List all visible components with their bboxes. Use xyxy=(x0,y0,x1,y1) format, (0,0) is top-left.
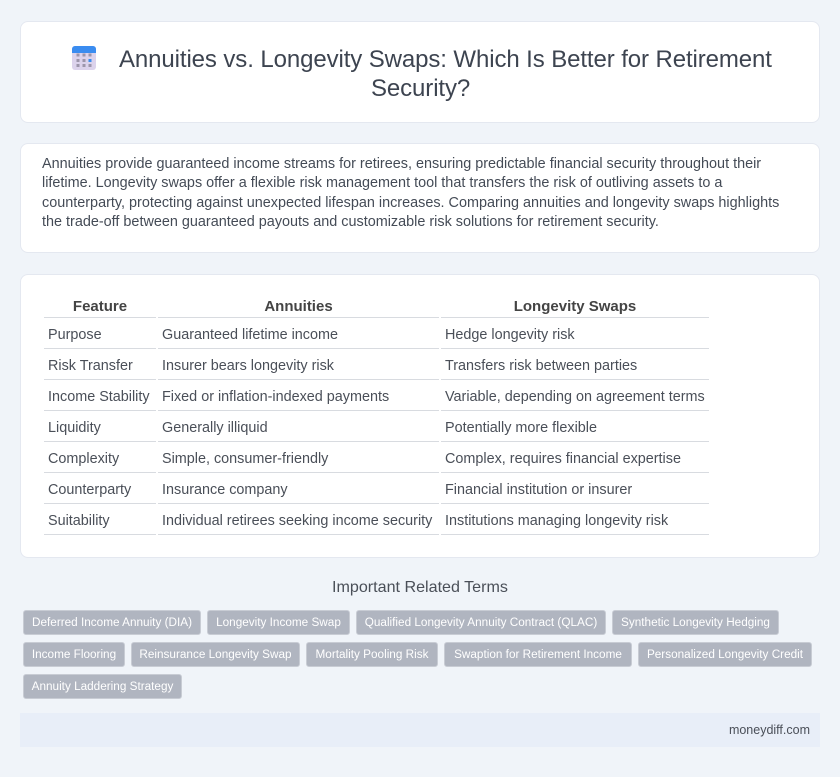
intro text xyxy=(42,156,779,230)
related terms tags: Synthetic Longevity Hedging xyxy=(621,616,770,629)
row: liquidity: Liquidity xyxy=(48,420,101,436)
related terms tags: Longevity Income Swap xyxy=(216,616,341,629)
related terms tags: Annuity Laddering Strategy xyxy=(32,680,173,693)
intro text: counterparty, protecting against unexpected lifespan increases. Comparing annuities and longevity swaps highlights xyxy=(42,194,779,210)
table header: Feature xyxy=(73,298,127,315)
row: purpose: Guaranteed lifetime income xyxy=(162,327,338,343)
icon: calendar xyxy=(72,46,96,70)
row: income stability: Variable, depending on agreement terms xyxy=(445,389,705,405)
comparison table panel xyxy=(20,274,820,558)
table header: Annuities xyxy=(264,298,333,315)
row: suitability: Suitability xyxy=(48,513,110,529)
related terms tags: Qualified Longevity Annuity Contract (QLAC) xyxy=(365,616,597,629)
table header xyxy=(73,298,636,315)
row: counterparty: Counterparty xyxy=(48,482,131,498)
row: complexity: Complexity xyxy=(48,451,119,467)
footer bar xyxy=(20,713,820,747)
related terms tags xyxy=(23,610,812,699)
title xyxy=(119,46,772,102)
row: purpose xyxy=(48,327,575,343)
related terms tags: Income Flooring xyxy=(32,648,116,661)
related terms heading: Important Related Terms xyxy=(332,578,508,596)
row: liquidity xyxy=(48,420,597,436)
header card xyxy=(20,21,820,123)
related terms tags: Reinsurance Longevity Swap xyxy=(139,648,292,661)
title: Annuities vs. Longevity Swaps: Which Is Better for Retirement xyxy=(119,46,772,73)
row: purpose: Purpose xyxy=(48,327,102,343)
intro text: the trade-off between guaranteed payouts and customizable risk solutions for retirement security. xyxy=(42,214,659,230)
row: complexity: Simple, consumer-friendly xyxy=(162,451,328,467)
row: counterparty xyxy=(48,482,632,498)
related terms tags: Deferred Income Annuity (DIA) xyxy=(32,616,192,629)
intro panel xyxy=(20,143,820,253)
related terms tags: Personalized Longevity Credit xyxy=(647,648,803,661)
row: risk transfer: Risk Transfer xyxy=(48,358,133,374)
row: suitability: Individual retirees seeking income security xyxy=(162,513,432,529)
related terms tags: Mortality Pooling Risk xyxy=(316,648,428,661)
row: risk transfer: Insurer bears longevity risk xyxy=(162,358,334,374)
row: risk transfer xyxy=(48,358,637,374)
row: suitability xyxy=(48,513,668,529)
source credit: moneydiff.com xyxy=(729,723,810,737)
intro text: Annuities provide guaranteed income streams for retirees, ensuring predictable financial security throughout their xyxy=(42,156,761,172)
related terms tags: Swaption for Retirement Income xyxy=(454,648,622,661)
row: counterparty: Insurance company xyxy=(162,482,288,498)
row: income stability xyxy=(48,389,705,405)
row: risk transfer: Transfers risk between parties xyxy=(445,358,637,374)
row: liquidity: Generally illiquid xyxy=(162,420,268,436)
row: income stability: Fixed or inflation-indexed payments xyxy=(162,389,389,405)
row: complexity xyxy=(48,451,681,467)
row: income stability: Income Stability xyxy=(48,389,150,405)
row: liquidity: Potentially more flexible xyxy=(445,420,597,436)
row: suitability: Institutions managing longevity risk xyxy=(445,513,668,529)
row: complexity: Complex, requires financial expertise xyxy=(445,451,681,467)
row: purpose: Hedge longevity risk xyxy=(445,327,575,343)
table header: Longevity Swaps xyxy=(514,298,636,315)
title: Security? xyxy=(371,75,470,102)
intro text: lifetime. Longevity swaps offer a flexible risk management tool that transfers the risk of outliving assets to a xyxy=(42,175,722,191)
row: counterparty: Financial institution or insurer xyxy=(445,482,632,498)
